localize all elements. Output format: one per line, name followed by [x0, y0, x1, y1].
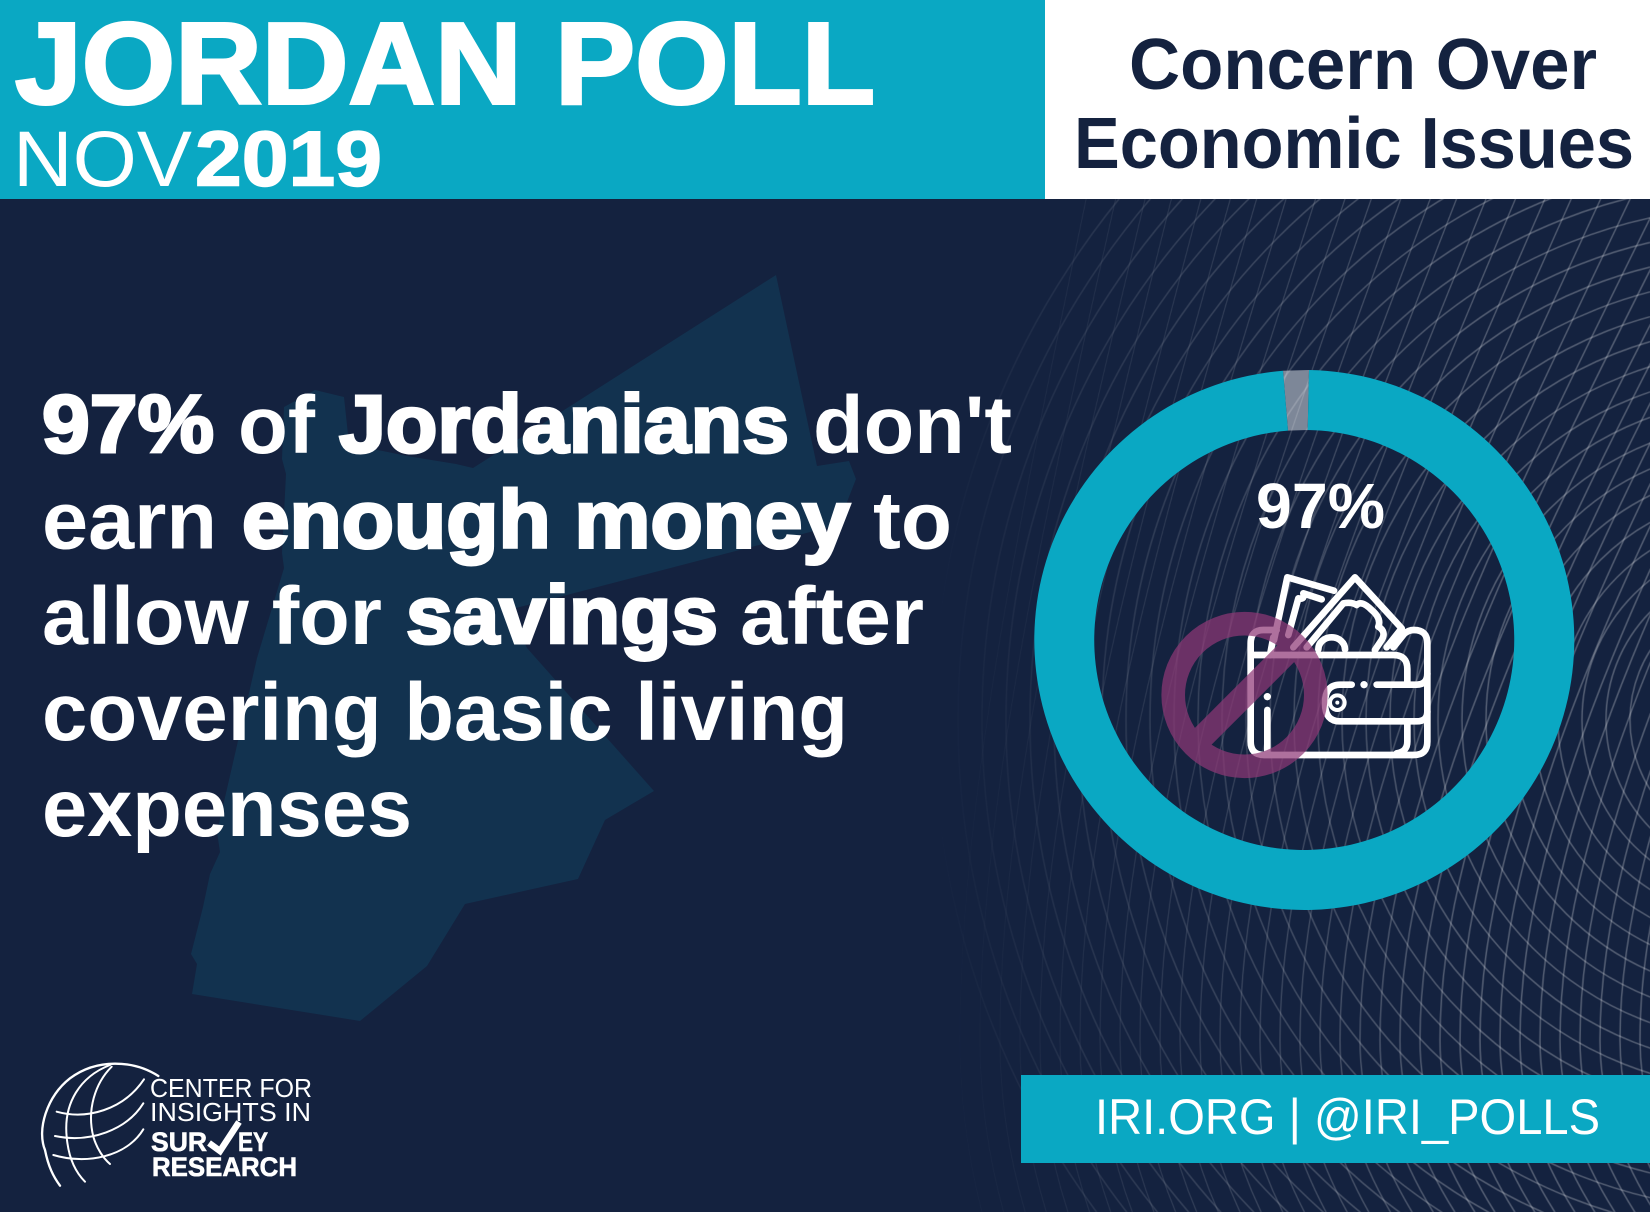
main statement: expenses: [42, 763, 412, 854]
logo: Center for Insights in Survey Research: RESEARCH: [152, 1152, 297, 1182]
main statement: to: [873, 476, 952, 566]
main statement: allow for: [42, 571, 382, 662]
icon: check mark: [209, 1122, 239, 1151]
donut chart: 97%: [1034, 370, 1574, 910]
logo: Center for Insights in Survey Research: EY: [238, 1127, 268, 1157]
header band: [0, 0, 1650, 203]
date: month: NOV: [13, 114, 192, 203]
footer contact bar: IRI.ORG | @IRI_POLLS: [1095, 1089, 1600, 1145]
background line pattern: [980, 199, 1650, 1212]
donut gap segment (3%): [1283, 370, 1309, 431]
icon: prohibition sign: [1173, 624, 1316, 766]
map of Jordan silhouette: [191, 275, 856, 1021]
logo text: CENTER FOR: [150, 1073, 312, 1103]
topic line 1: Concern Over: [1129, 25, 1597, 105]
main statement: after: [740, 571, 924, 662]
title: JORDAN POLL: [15, 0, 875, 128]
icon: wallet with banknotes: [1251, 577, 1427, 755]
topic line 2: Economic Issues: [1074, 104, 1634, 184]
main statement: savings: [406, 570, 718, 661]
footer contact bar: [1021, 1075, 1650, 1163]
main statement: Jordanians: [339, 379, 789, 470]
main statement: 97%: [42, 379, 214, 470]
main statement: enough money: [242, 474, 850, 566]
date: year: 2019: [195, 114, 382, 202]
main statement: covering basic living: [42, 667, 848, 758]
logo: Center for Insights in Survey Research: SUR: [151, 1127, 207, 1157]
main statement: earn: [42, 476, 217, 566]
main statement: of: [238, 380, 316, 471]
main statement: don't: [813, 380, 1012, 471]
icon: globe: [42, 1064, 158, 1186]
donut value label: 97%: [1256, 470, 1385, 542]
logo: Center for Insights in Survey Research: INSIGHTS IN: [150, 1097, 311, 1127]
logo: Center for Insights in Survey Research: [42, 1064, 312, 1186]
main statement: [42, 379, 1012, 854]
